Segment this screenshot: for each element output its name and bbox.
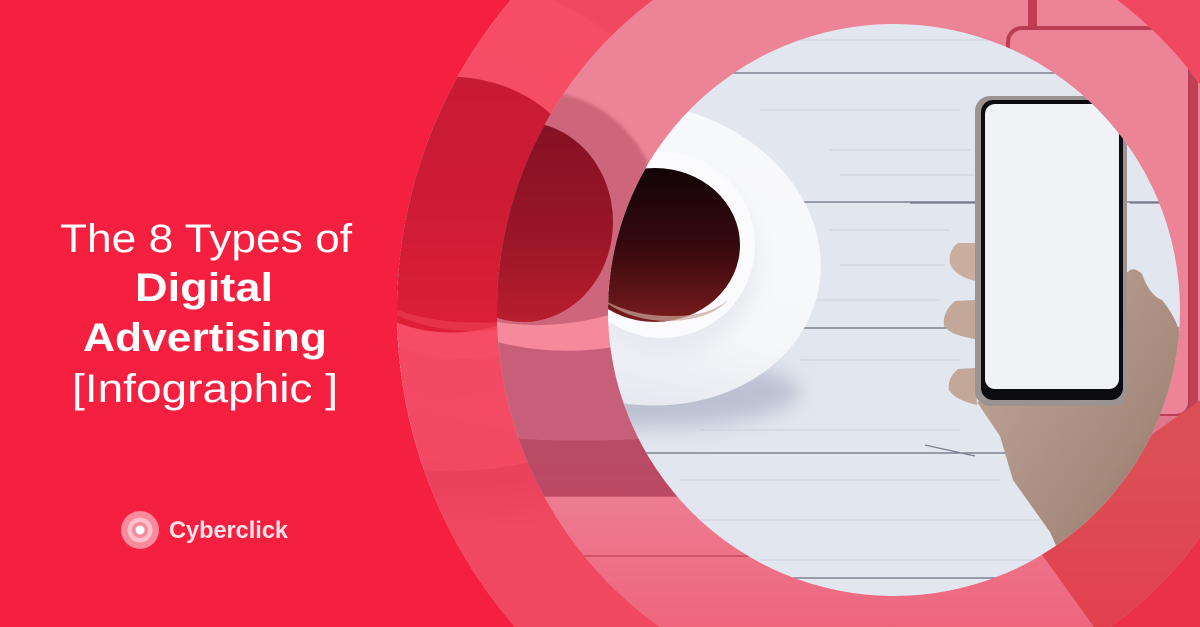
middle ring: tinted photo bbox=[497, 0, 1200, 627]
title: The 8 Types of bbox=[60, 217, 353, 261]
hand holding phone bbox=[944, 243, 1180, 546]
phone bbox=[975, 96, 1127, 406]
left side of ring: enlarged cup bbox=[497, 0, 885, 627]
right side of ring: enlarged phone and hand bbox=[885, 0, 1200, 627]
icon: concentric target bbox=[121, 511, 159, 549]
title: Advertising bbox=[83, 316, 327, 360]
logo: Cyberclick bbox=[121, 511, 289, 549]
photo circle: coffee, phone and hand on wooden table bbox=[608, 24, 1180, 596]
outer ring: tinted photo bbox=[397, 0, 1200, 627]
logo wordmark: Cyberclick bbox=[169, 517, 289, 544]
title: [Infographic ] bbox=[72, 367, 338, 411]
title bbox=[60, 217, 353, 411]
title: Digital bbox=[135, 266, 273, 310]
coffee cup on saucer bbox=[608, 112, 821, 436]
